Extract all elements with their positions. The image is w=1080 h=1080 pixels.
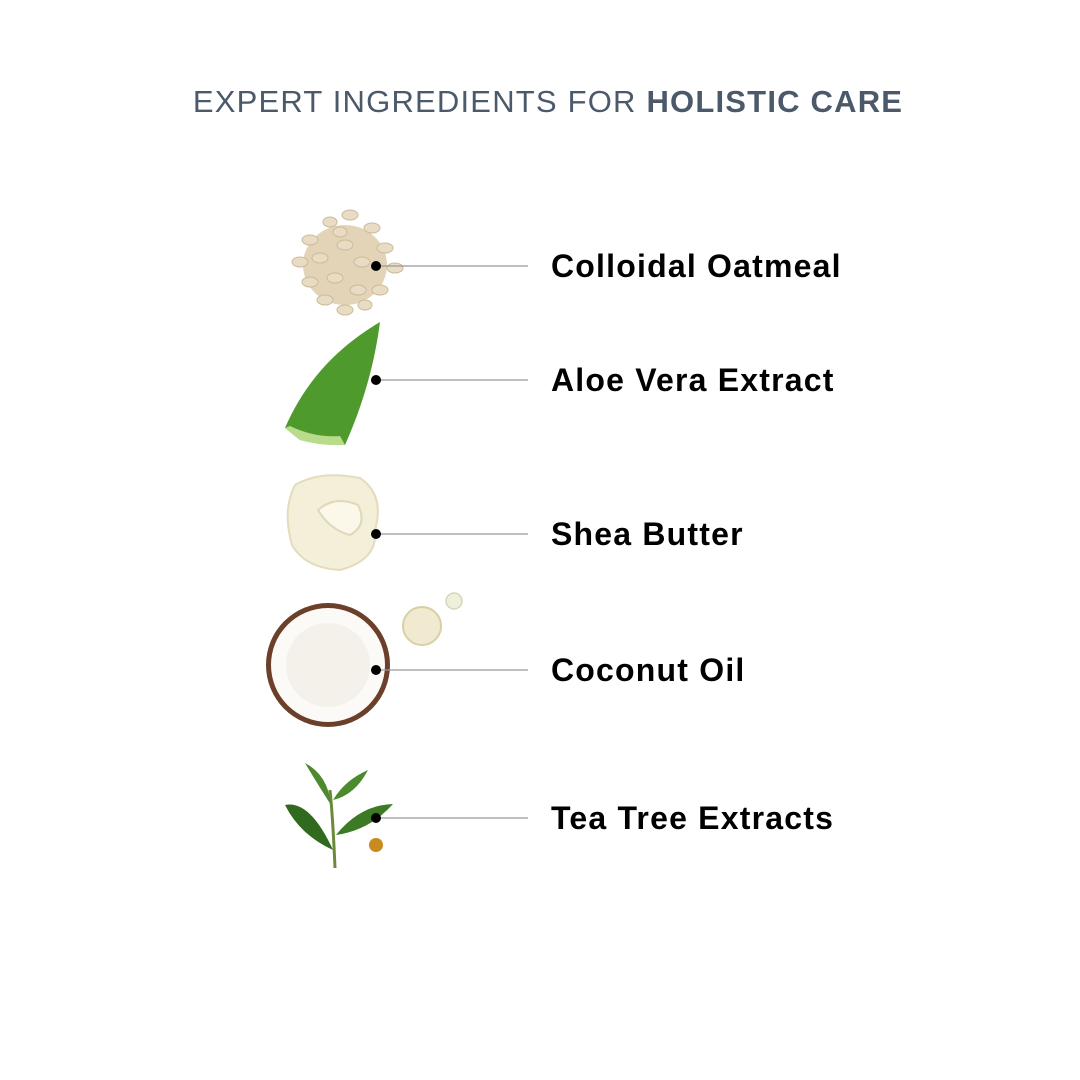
connectors (376, 266, 528, 818)
icon: shea butter (288, 475, 378, 570)
icon: oil drops (403, 593, 462, 645)
icon: coconut (266, 603, 390, 727)
icon: aloe vera leaf (285, 322, 380, 445)
label: aloe: Aloe Vera Extract (551, 362, 835, 398)
label: coconut: Coconut Oil (551, 652, 746, 688)
icon: oatmeal pile (292, 210, 403, 315)
title: EXPERT INGREDIENTS FOR HOLISTIC CARE (193, 84, 903, 119)
icon: amber drop (369, 838, 383, 852)
label: shea: Shea Butter (551, 516, 744, 552)
label: oatmeal: Colloidal Oatmeal (551, 248, 842, 284)
label: tea tree: Tea Tree Extracts (551, 800, 834, 836)
icon: tea tree sprig (285, 763, 393, 868)
